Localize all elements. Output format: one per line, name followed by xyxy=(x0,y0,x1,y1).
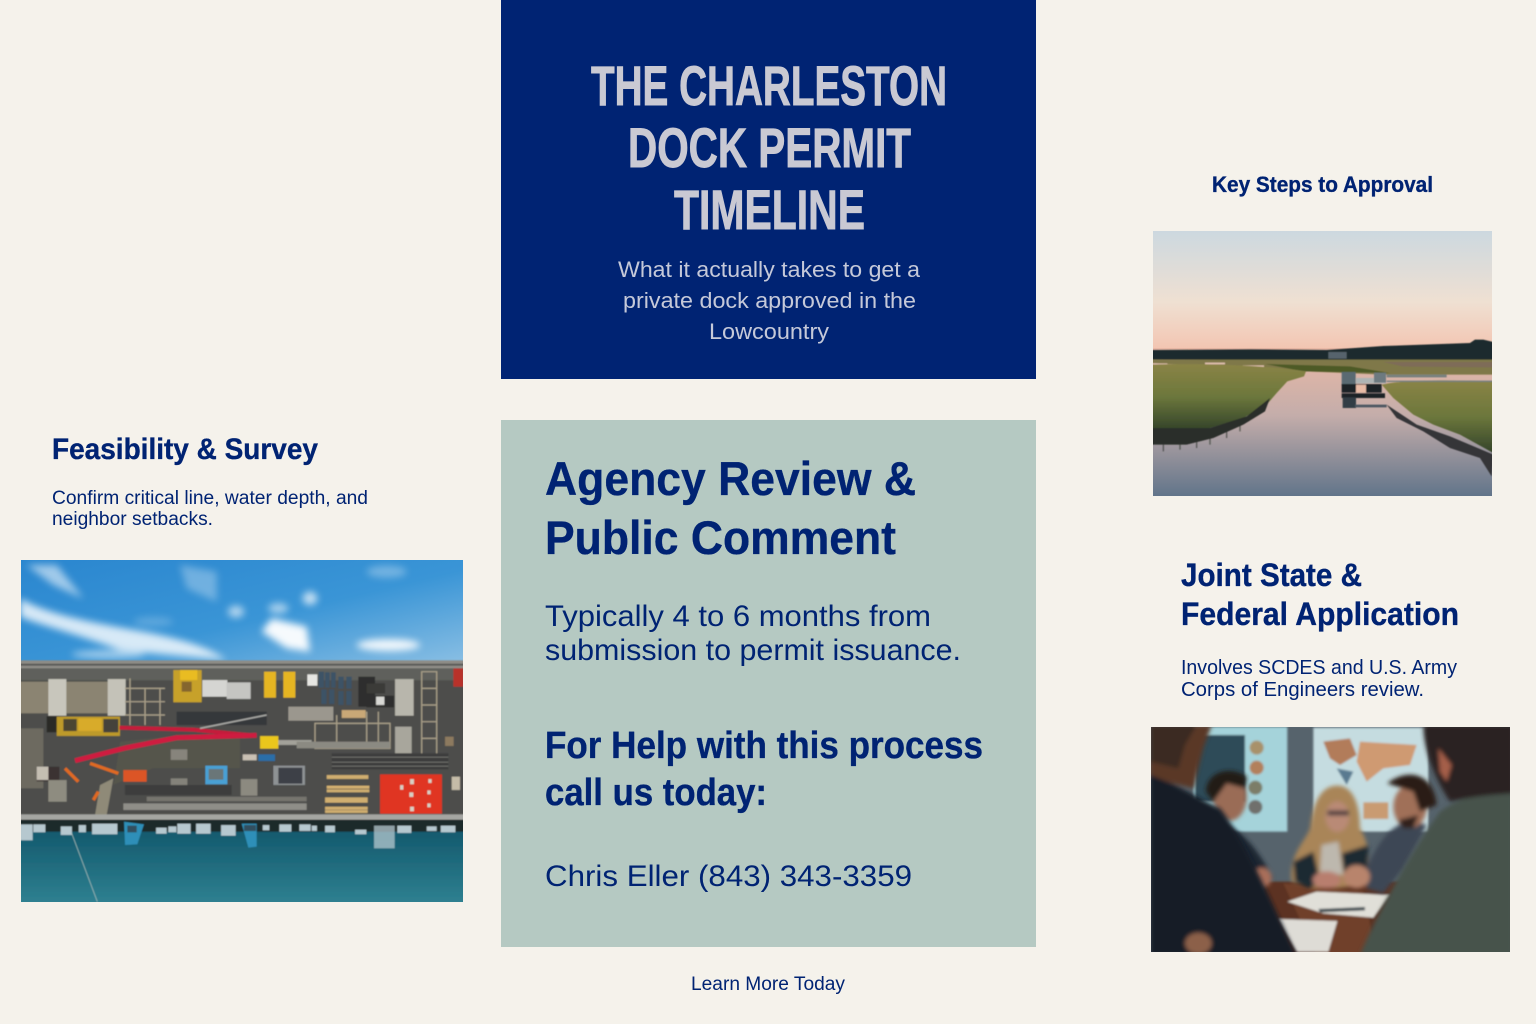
subtitle: Lowcountry xyxy=(709,319,830,344)
heading: key steps to approval: Key Steps to Approval xyxy=(1212,172,1433,197)
heading: joint state and federal application: Federal Application xyxy=(1181,596,1459,632)
heading: feasibility and survey: Feasibility & Survey xyxy=(52,433,318,466)
title: THE CHARLESTON xyxy=(591,54,947,117)
text: review duration: Typically 4 to 6 months from xyxy=(545,600,931,633)
subtitle: What it actually takes to get a xyxy=(618,257,920,282)
image: aerial of construction dock xyxy=(20,558,467,903)
man right xyxy=(1363,822,1427,893)
text: contact phone: Chris Eller (843) 343-3359 xyxy=(545,860,912,893)
text: feasibility description: Confirm critical line, water depth, and xyxy=(52,488,368,509)
image: meeting around a table xyxy=(1150,725,1513,955)
foreground figure left xyxy=(1150,775,1297,955)
heading: agency review: Public Comment xyxy=(545,511,896,564)
link: learn more: Learn More Today xyxy=(691,974,845,995)
title xyxy=(591,54,947,241)
image: marsh at sunset with dock xyxy=(1150,228,1497,498)
text: feasibility description xyxy=(52,488,368,530)
heading: call to action xyxy=(545,725,983,814)
woman xyxy=(1291,786,1368,888)
foreground figure right xyxy=(1360,793,1513,955)
text: application description xyxy=(1181,656,1458,701)
heading: agency review: Agency Review & xyxy=(545,452,916,505)
subtitle: private dock approved in the xyxy=(623,288,916,313)
text: application description: Involves SCDES and U.S. Army xyxy=(1181,656,1458,679)
subtitle xyxy=(618,257,920,344)
man left xyxy=(1210,826,1273,882)
heading: joint state and federal application: Joint State & xyxy=(1181,557,1362,593)
panel: title xyxy=(501,0,1036,379)
text: review duration xyxy=(545,600,961,667)
title: DOCK PERMIT xyxy=(628,116,911,179)
heading: joint state and federal application xyxy=(1181,557,1459,632)
heading: call to action: call us today: xyxy=(545,772,767,814)
text: review duration: submission to permit issuance. xyxy=(545,634,961,667)
heading: agency review xyxy=(545,452,916,564)
text: feasibility description: neighbor setbacks. xyxy=(52,509,213,530)
title: TIMELINE xyxy=(674,178,865,241)
panel: agency review and contact xyxy=(501,420,1036,947)
text: application description: Corps of Engineers review. xyxy=(1181,678,1424,701)
heading: call to action: For Help with this process xyxy=(545,725,983,767)
